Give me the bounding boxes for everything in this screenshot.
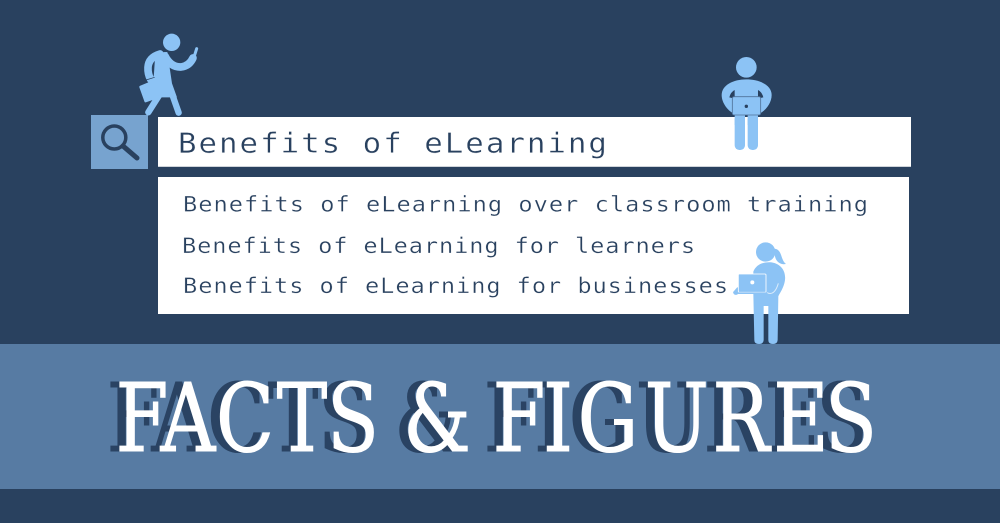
- icon: walking person with briefcase: [141, 34, 197, 113]
- search bar: [158, 117, 911, 167]
- suggestions panel: [158, 177, 909, 314]
- search icon button: [91, 115, 148, 169]
- icon: woman standing with laptop: [733, 242, 786, 344]
- title shadow: FACTS & FIGURES: [107, 364, 868, 474]
- suggestion 1: Benefits of eLearning over classroom training: [183, 192, 868, 217]
- suggestion 3: Benefits of eLearning for businesses: [183, 274, 728, 299]
- search query text: Benefits of eLearning: [178, 127, 607, 159]
- icon: person seated with laptop: [722, 57, 772, 150]
- suggestion 2: Benefits of eLearning for learners: [182, 234, 695, 259]
- band: facts and figures: [0, 344, 1000, 489]
- title: FACTS & FIGURES: [116, 364, 877, 474]
